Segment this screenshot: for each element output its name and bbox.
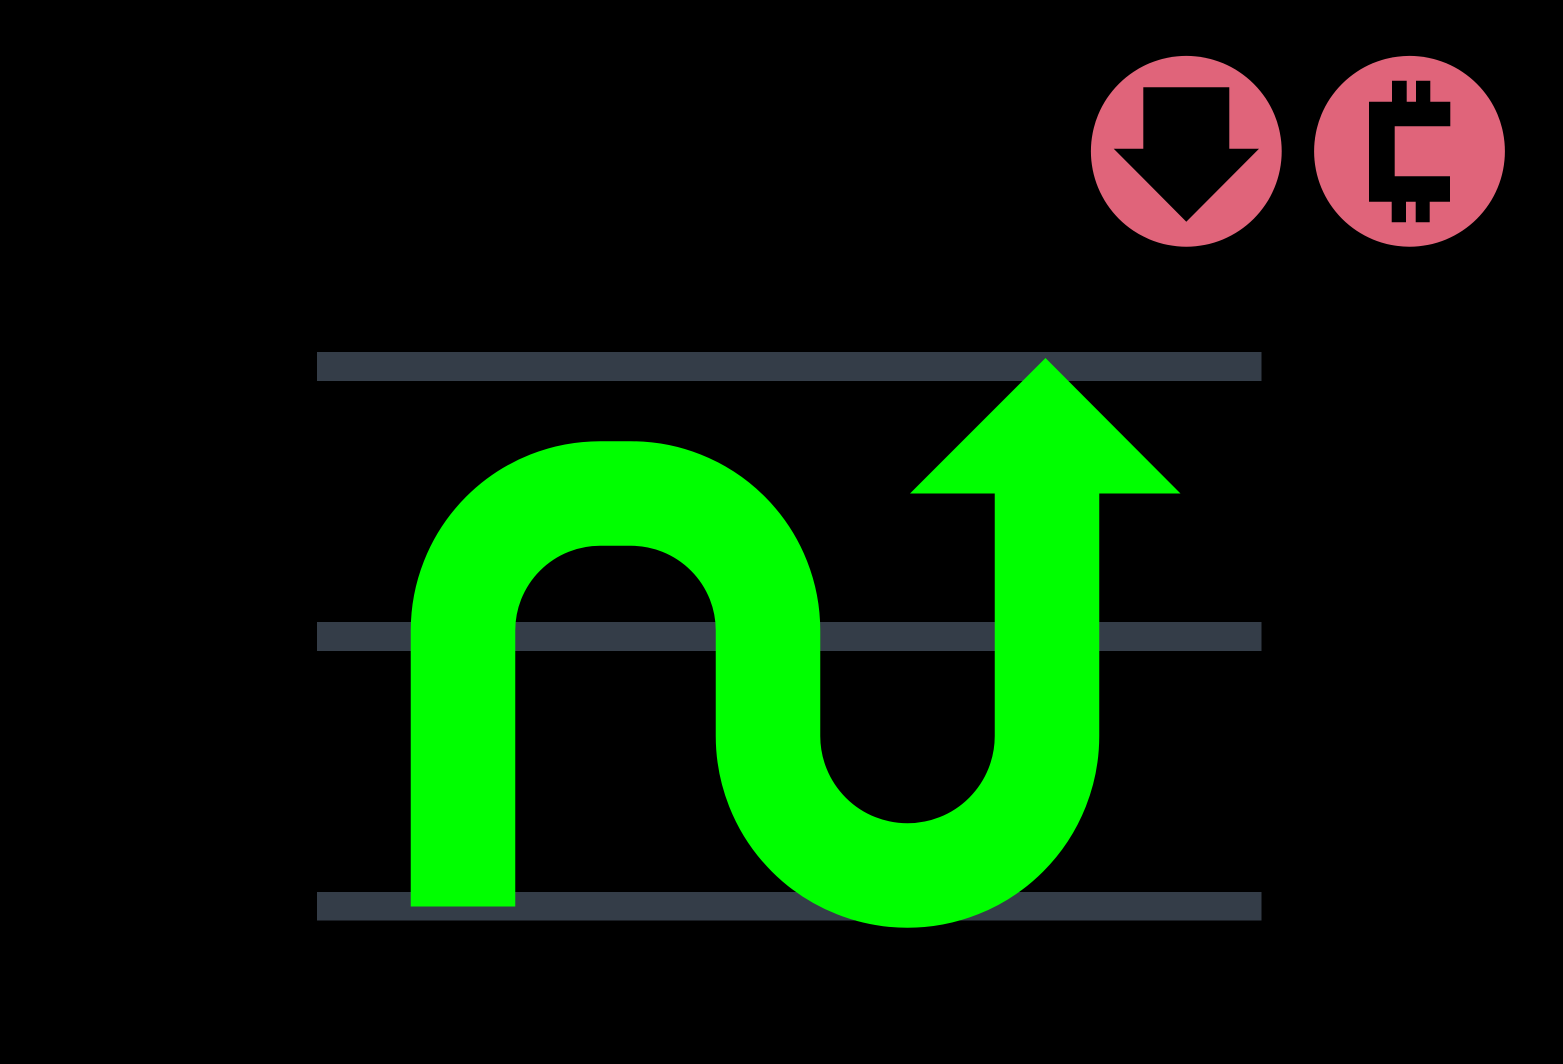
horizontal level bars <box>317 352 1262 920</box>
icon: bitcoin badge <box>1314 56 1505 247</box>
icon: down arrow badge <box>1091 56 1282 247</box>
green winding arrow <box>463 358 1180 906</box>
